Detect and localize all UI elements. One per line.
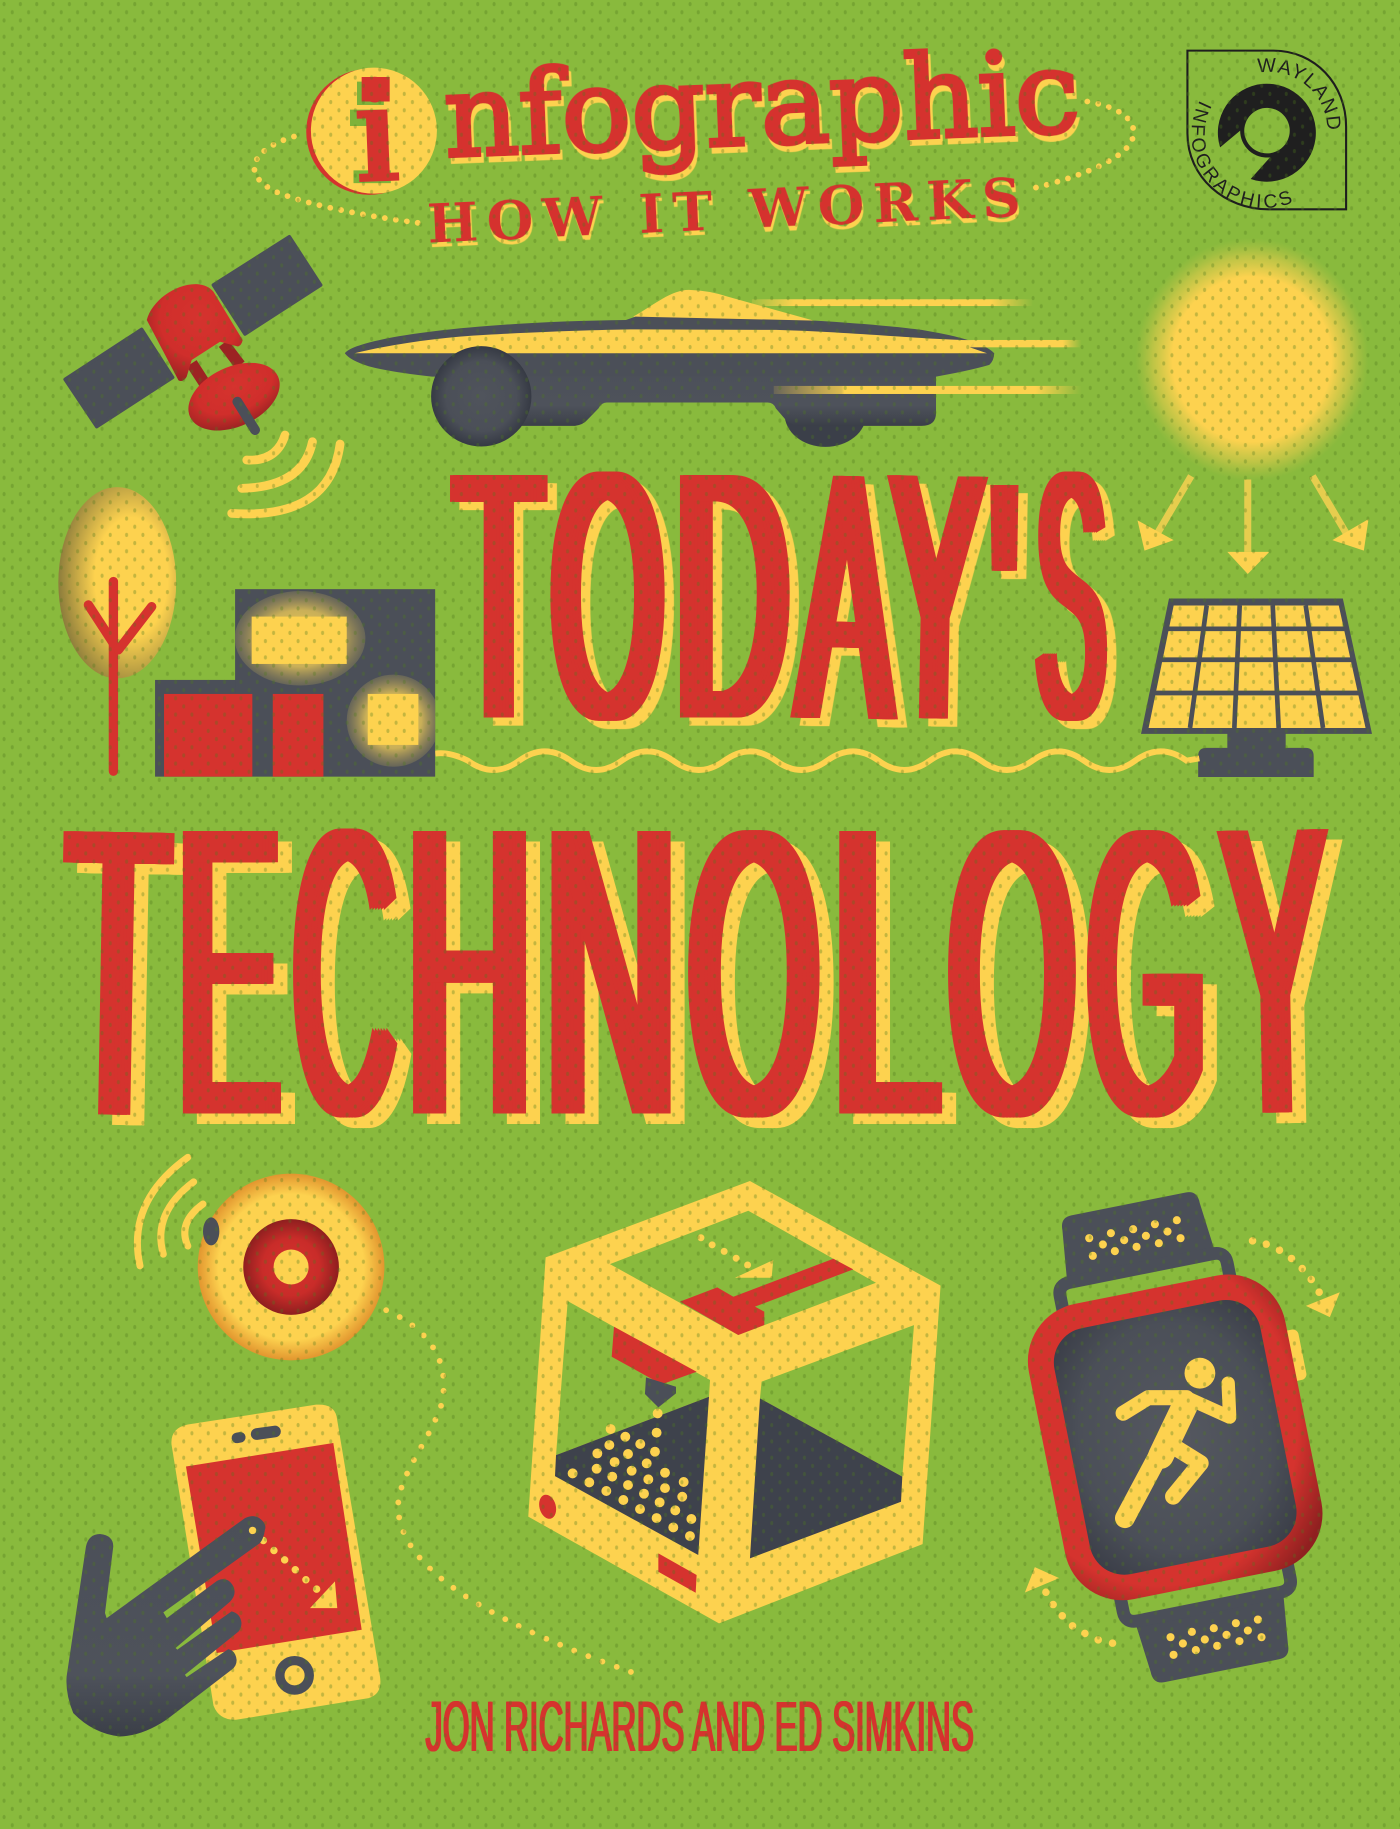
printer left window [556, 1301, 710, 1455]
printer extruder [612, 1327, 697, 1407]
satellite dish [178, 349, 290, 444]
printer dotted arrow [701, 1238, 773, 1278]
icon: satellite signal waves [232, 435, 340, 514]
icon: smart eye sensor [137, 1157, 384, 1360]
car front wheel [431, 346, 531, 446]
satellite right solar panel [213, 237, 321, 334]
car shell [345, 317, 994, 377]
title word: TECHNOLOGY: E [170, 744, 272, 1204]
title word: TECHNOLOGY: L [824, 744, 929, 1204]
title word: TODAY'S: T [447, 400, 534, 795]
i badge letter: i [350, 51, 404, 215]
printer build plate left [555, 1397, 709, 1555]
title word: TODAY'S: D [667, 400, 779, 795]
icon: satellite [65, 237, 321, 444]
dotted loop around series title [254, 102, 1134, 223]
title word: TODAY'S: ' [984, 401, 1009, 845]
title word: TECHNOLOGY: Y [1211, 742, 1323, 1204]
publisher logo: Wayland Infographics: INFOGRAPHICS [1192, 102, 1292, 208]
icon: hand swiping [66, 1516, 265, 1736]
title word: TECHNOLOGY: H [399, 744, 523, 1204]
i badge circle [306, 68, 437, 195]
power cable wave [435, 751, 1199, 770]
dotted link from sensor to author [386, 1310, 644, 1677]
title word: TODAY'S: S [1030, 400, 1099, 795]
title word: TODAY'S: A [789, 400, 887, 797]
title word: TECHNOLOGY: O [940, 748, 1067, 1203]
title word: TECHNOLOGY [53, 742, 1342, 1206]
satellite left solar panel [65, 329, 173, 427]
watch top strap [1045, 1187, 1232, 1322]
car speed lines front [774, 340, 1082, 394]
how it works subtitle: HOW IT WORKS [426, 166, 1022, 256]
title word: TODAY'S [447, 400, 1117, 845]
title word: TODAY'S: O [544, 400, 654, 795]
i badge square dot [362, 77, 390, 102]
publisher logo: Wayland Infographics [1186, 50, 1348, 210]
icon: lit buildings [155, 589, 440, 777]
icon: sun [1135, 238, 1369, 481]
icon: smartphone [171, 1405, 380, 1720]
printer right window [760, 1325, 914, 1477]
car yellow stripe [355, 329, 987, 353]
icon: solar panel [1141, 599, 1372, 777]
car lower body [467, 354, 936, 426]
icon: smart watch [1000, 1176, 1360, 1696]
title word: TECHNOLOGY: C [286, 746, 389, 1203]
title word: TECHNOLOGY: O [680, 748, 811, 1203]
title word: TECHNOLOGY: G [1079, 748, 1199, 1203]
printer build plate right [750, 1398, 902, 1558]
icon: solar car [345, 290, 1082, 447]
satellite body [147, 284, 243, 381]
printer red slot [658, 1553, 697, 1593]
infographic wordmark: nfographic [442, 26, 1082, 184]
watch strap dots [1089, 1220, 1262, 1655]
icon: sun ray arrows [1138, 476, 1369, 574]
printer top opening [610, 1211, 876, 1335]
watch side button [1280, 1328, 1307, 1382]
car rear wheel [785, 382, 866, 447]
printer head rail [680, 1259, 853, 1335]
title word: TECHNOLOGY: T [53, 744, 163, 1206]
author credit: JON RICHARDS AND ED SIMKINS [425, 1687, 973, 1766]
icon: tree [58, 487, 176, 771]
icon: 3D printer [528, 1181, 941, 1623]
watch bottom strap [1118, 1552, 1305, 1687]
logo: infographic how it works series title [254, 26, 1134, 256]
satellite neck struts [192, 343, 240, 387]
watch case [1018, 1264, 1333, 1611]
car canopy [633, 290, 817, 322]
watch rotate arrow top [1253, 1241, 1340, 1317]
title word: TODAY'S: Y [878, 400, 976, 797]
publisher logo: Wayland Infographics: WAYLAND [1257, 58, 1340, 129]
watch rotate arrow bottom [1025, 1567, 1113, 1643]
printer red light [537, 1493, 559, 1521]
printed dots [573, 1413, 691, 1536]
title word: TECHNOLOGY: N [537, 744, 667, 1204]
satellite antenna [237, 402, 255, 430]
icon: runner on watch screen [1123, 1358, 1230, 1518]
watch screen [1048, 1294, 1303, 1581]
car speed lines back [752, 299, 1033, 306]
